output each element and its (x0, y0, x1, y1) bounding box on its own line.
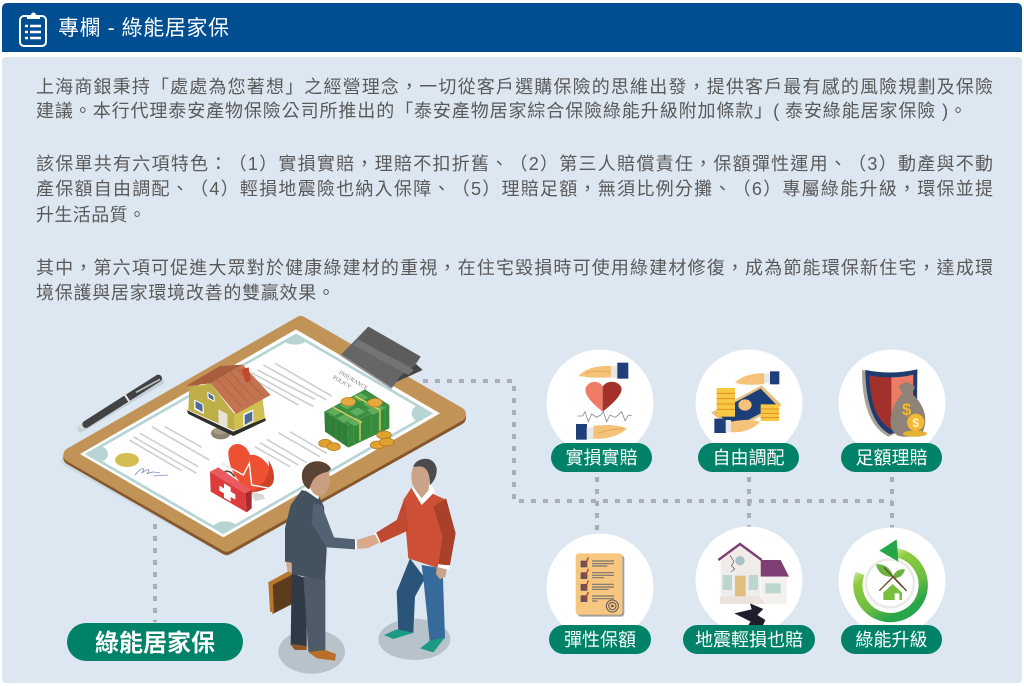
paragraph 3: 境保護與居家環境改善的雙贏效果。 (36, 283, 335, 303)
icon: house (186, 365, 271, 439)
title: 專欄 - 綠能居家保 (58, 17, 230, 40)
icon: cracked house (718, 544, 789, 627)
label: green home insurance: 綠能居家保 (95, 630, 215, 657)
pill label: 地震輕損也賠 (695, 630, 803, 650)
body text (36, 77, 993, 303)
icon: shield and money bag: $ (912, 416, 919, 430)
feature: flexible adjustment (696, 350, 802, 472)
icon: money and coins (711, 371, 782, 433)
feature: actual loss compensation (546, 350, 654, 472)
illustration: insurance policy clipboard (69, 323, 459, 549)
pill label: 彈性保額 (564, 630, 636, 650)
header bar (2, 3, 1022, 52)
pill label: 自由調配 (712, 448, 784, 468)
label: insurance policy: INSURANCE (338, 370, 368, 392)
paragraph 2: 該保單共有六項特色：（1）實損實賠，理賠不扣折舊、（2）第三人賠償責任，保額彈性運用、（3）動產與不動 (36, 154, 993, 174)
paragraph 3 (36, 258, 993, 303)
pill label: 實損實賠 (566, 448, 638, 468)
policy text lines (129, 363, 332, 473)
dotted connector lines (155, 381, 892, 622)
label: insurance policy: POLICY (331, 375, 352, 390)
paragraph 3: 其中，第六項可促進大眾對於健康綠建材的重視，在住宅毀損時可使用綠建材修復，成為節能環保新住宅，達成環 (36, 258, 993, 278)
paragraph 2: 升生活品質。 (36, 205, 146, 225)
label: green home insurance (67, 623, 243, 661)
paragraph 1: 建議。本行代理泰安產物保險公司所推出的「泰安產物居家綜合保險綠能升級附加條款」( 泰安綠能居家保險 )。 (36, 101, 967, 121)
feature: full claim settlement (838, 350, 946, 472)
illustration: two men shaking hands (268, 459, 456, 674)
paragraph 2 (36, 154, 993, 225)
paragraph 1 (36, 77, 993, 121)
pill label: 綠能升級 (856, 630, 928, 650)
paragraph 1: 上海商銀秉持「處處為您著想」之經營理念，一切從客戶選購保險的思維出發，提供客戶最有感的風險規劃及保險 (36, 77, 993, 97)
man in red sweater (374, 459, 456, 660)
icon: green cycle house (858, 539, 923, 618)
icon: heart and first aid case (210, 444, 274, 512)
icon: clipboard list (19, 12, 47, 47)
feature: flexible coverage (546, 534, 654, 654)
icon: hands and heart (576, 363, 632, 440)
feature: green energy upgrade (838, 528, 946, 654)
signature (135, 469, 168, 476)
clipboard board (69, 323, 459, 549)
icon: shield and money bag (862, 369, 927, 437)
icon: checklist document (576, 553, 624, 617)
handshake (357, 534, 379, 549)
man in suit (268, 461, 357, 674)
icon: shield and money bag: $ (902, 400, 912, 419)
paragraph 2: 產保額自由調配、（4）輕損地震險也納入保障、（5）理賠足額，無須比例分攤、（6）專屬綠能升級，環保並提 (36, 179, 993, 199)
icon: pen (74, 378, 162, 430)
icon: stack of money (319, 389, 394, 451)
feature: minor earthquake damage covered (683, 526, 815, 654)
policy paper (80, 327, 440, 540)
metal clip (341, 327, 423, 388)
pill label: 足額理賠 (856, 448, 928, 468)
seal (115, 453, 139, 467)
